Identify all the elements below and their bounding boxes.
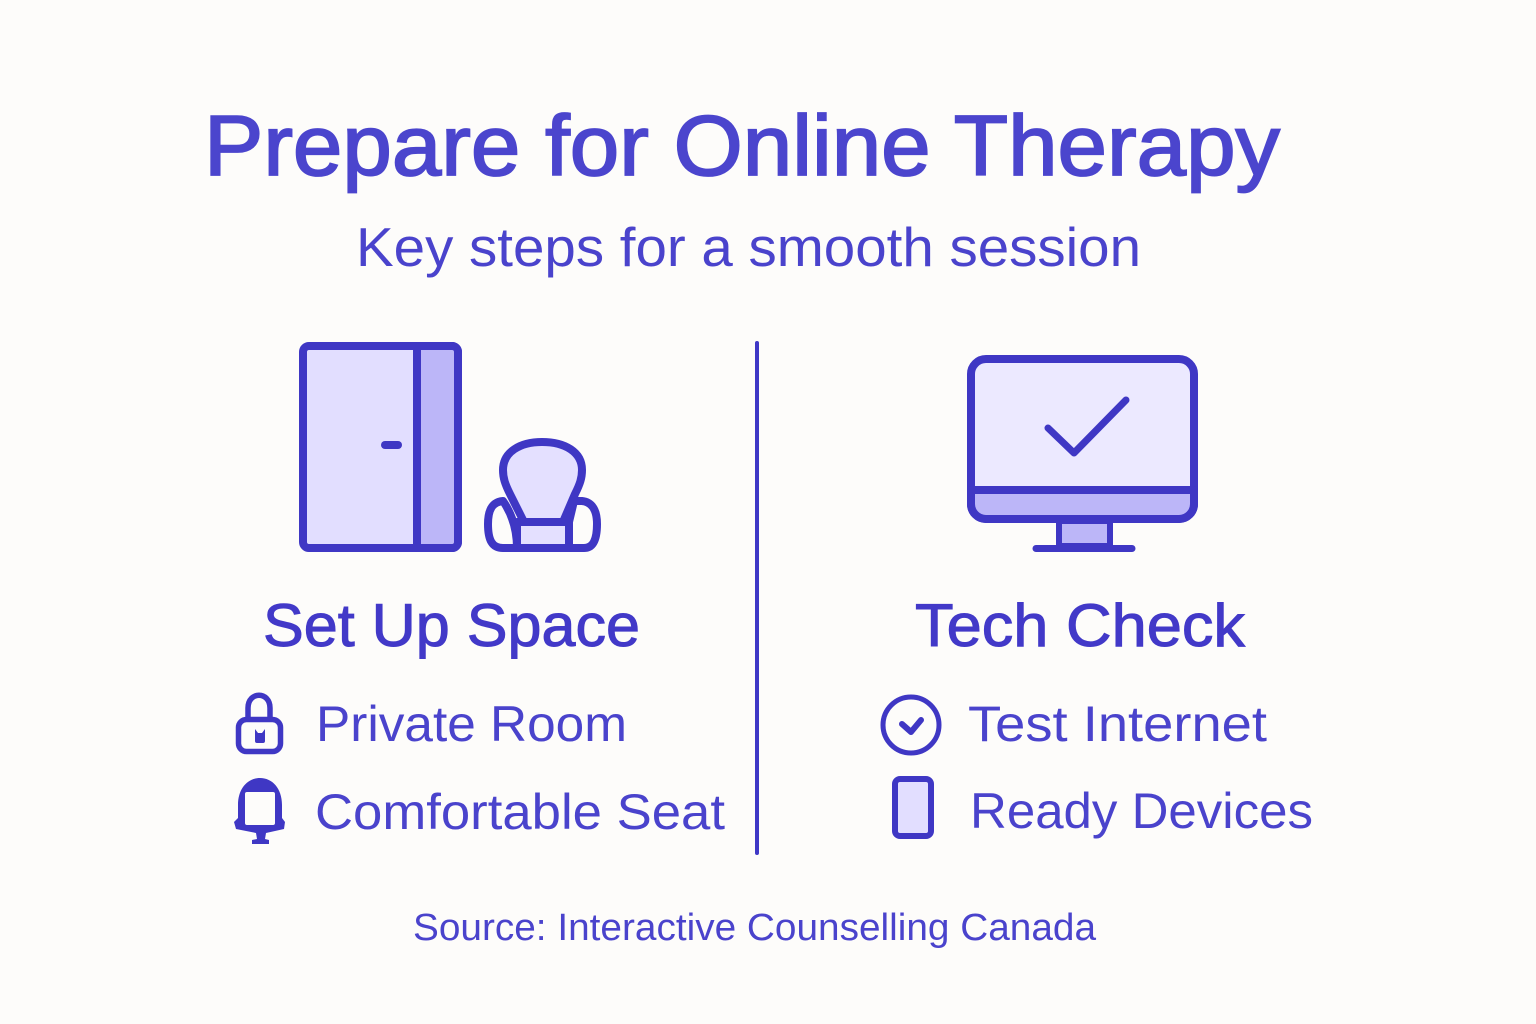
icon: circle check [883,697,939,753]
center divider [755,341,759,855]
panel: tech check [883,359,1313,839]
label: test internet: Test Internet [968,696,1267,752]
item: comfortable seat [234,778,725,844]
label: ready devices: Ready Devices [970,783,1313,839]
item: ready devices [895,779,1313,839]
panel: set up space [234,346,725,844]
icon: device [895,779,931,836]
item: private room [238,695,627,752]
label: private room: Private Room [316,696,627,752]
subtitle: Key steps for a smooth session [356,216,1141,278]
icon: monitor with check [971,359,1194,548]
source note: Source: Interactive Counselling Canada [413,907,1097,949]
icon: padlock [238,695,280,752]
title: Prepare for Online Therapy [204,99,1281,194]
heading: tech check: Tech Check [915,592,1246,659]
icon: armchair [488,442,597,548]
item: test internet [883,696,1267,753]
heading: set up space: Set Up Space [263,592,640,659]
label: comfortable seat: Comfortable Seat [315,784,725,840]
icon: chair back [234,778,285,844]
icon: door [303,346,458,548]
